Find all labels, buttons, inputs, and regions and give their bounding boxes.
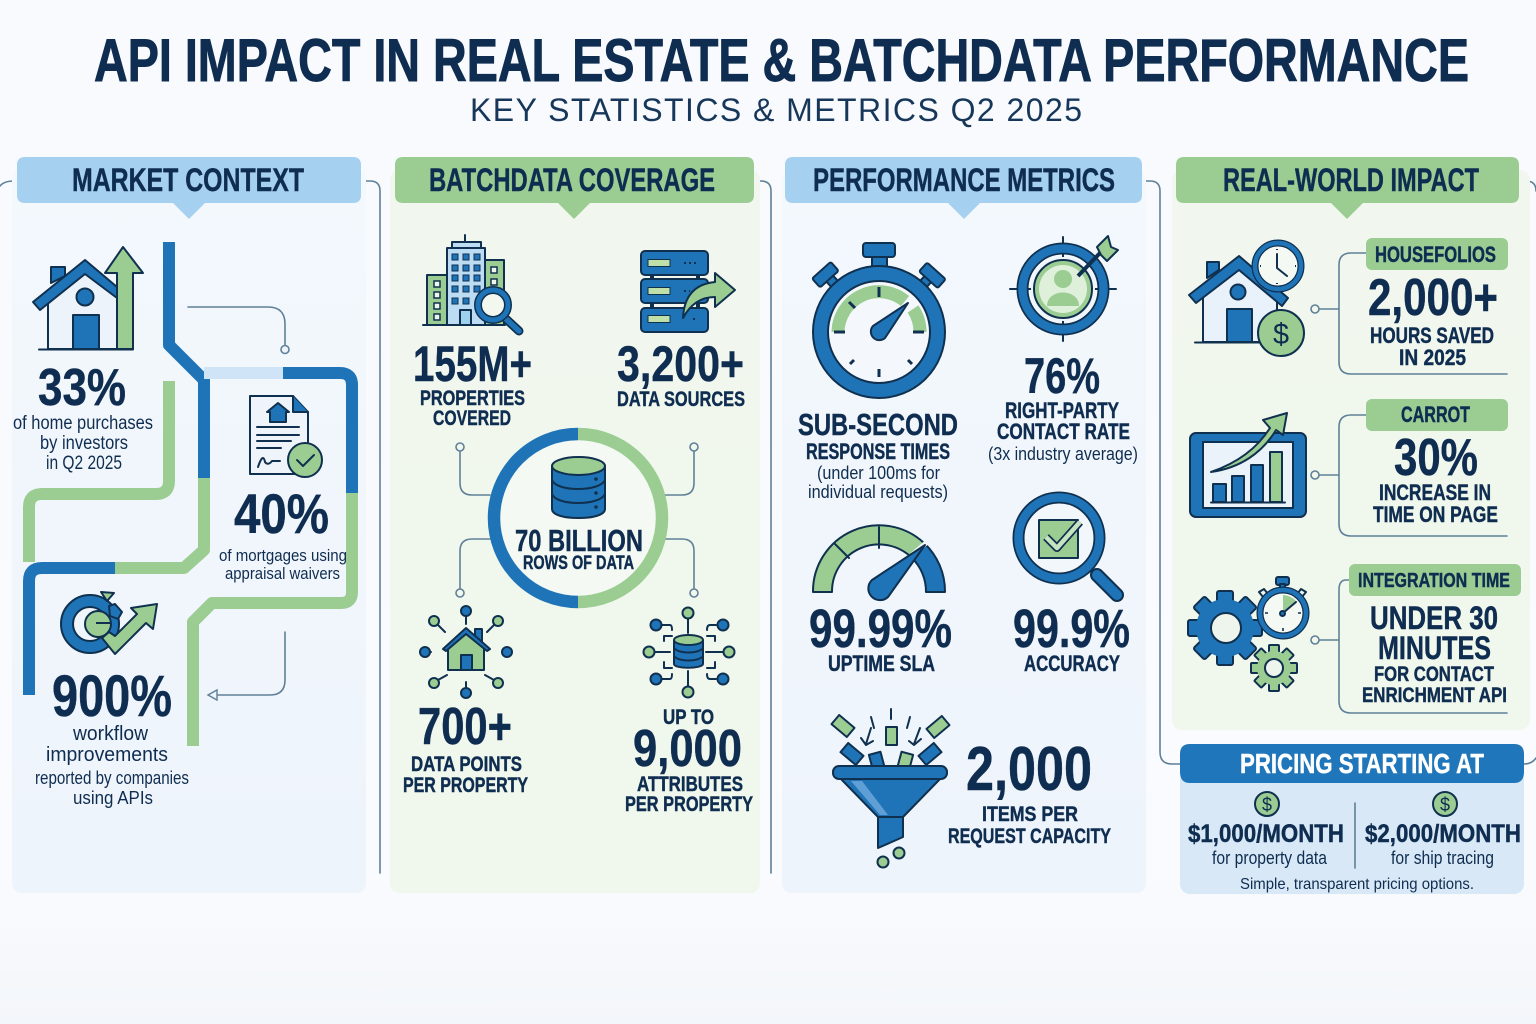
stat: 155M+ properties covered	[413, 336, 532, 430]
callout: carrot: CARROT	[1401, 402, 1470, 427]
stat: 900%: workflow	[72, 723, 149, 745]
callout: integration time: UNDER 30	[1370, 600, 1498, 636]
stat: 40%: of mortgages using	[219, 546, 347, 565]
stat: 2,000 items per request: ITEMS PER	[982, 803, 1078, 826]
callout: housefolios: IN 2025	[1399, 345, 1466, 370]
callout: carrot: 30%	[1394, 429, 1478, 487]
stat: 99.9% accuracy: 99.9%	[1013, 599, 1130, 659]
stat: up to 9,000 attributes: UP TO	[663, 706, 714, 729]
icon: house with clock and dollar: $	[1273, 318, 1289, 351]
stat: up to 9,000 attributes: PER PROPERTY	[625, 793, 753, 816]
callout: carrot: INCREASE IN	[1379, 480, 1491, 505]
header: real-world impact	[1176, 157, 1519, 219]
stat: 700+ data points	[403, 698, 528, 797]
pricing note: Simple, transparent pricing options.	[1240, 876, 1474, 893]
icon: buildings with magnifier	[423, 235, 519, 331]
stat: 99.9% accuracy	[1013, 599, 1130, 676]
header: market context: MARKET CONTEXT	[72, 162, 304, 198]
callout: integration time	[1311, 564, 1521, 713]
stat: 700+ data points: 700+	[418, 698, 512, 756]
icon: circular target with rising arrow	[67, 592, 157, 654]
stat: sub-second response times	[798, 407, 958, 502]
icon: uptime gauge	[813, 525, 945, 600]
header: pricing starting at	[1180, 744, 1524, 783]
header: batchdata coverage	[395, 157, 754, 219]
callout: integration time: FOR CONTACT	[1374, 663, 1494, 686]
panel: market context	[12, 157, 366, 893]
callout: housefolios	[1311, 238, 1508, 374]
stat: sub-second response times: (under 100ms for	[817, 463, 940, 483]
panel: real-world impact	[1172, 157, 1530, 730]
panel: pricing	[1180, 744, 1524, 894]
stat: 900%: using APIs	[73, 788, 153, 808]
stat: 700+ data points: DATA POINTS	[411, 753, 522, 776]
price: $1,000 per month	[1188, 792, 1344, 868]
stat: 900%	[35, 664, 189, 808]
connector lines around central ring	[456, 443, 698, 597]
icon: funnel with data pieces	[831, 709, 950, 868]
header: batchdata coverage: BATCHDATA COVERAGE	[429, 162, 715, 198]
stat: 99.99% uptime	[809, 599, 952, 676]
stat: 155M+ properties covered: PROPERTIES	[420, 387, 525, 410]
icon: tablet with rising chart	[1190, 413, 1306, 517]
stat: up to 9,000 attributes: 9,000	[633, 720, 742, 778]
callout: housefolios: 2,000+	[1368, 269, 1498, 327]
stat: 700+ data points: PER PROPERTY	[403, 774, 528, 797]
stat: 40%	[219, 482, 347, 583]
stat: 33%: in Q2 2025	[46, 453, 122, 474]
stat: 155M+ properties covered: COVERED	[433, 407, 511, 430]
callout: housefolios: HOURS SAVED	[1370, 323, 1494, 348]
stat: 33%: of home purchases	[13, 413, 153, 434]
price: $1,000 per month: for property data	[1212, 848, 1328, 868]
stat: 40%: appraisal waivers	[225, 564, 340, 583]
panel: performance metrics	[782, 157, 1146, 893]
price: $1,000 per month: $1,000/MONTH	[1188, 820, 1344, 848]
subtitle: KEY STATISTICS & METRICS Q2 2025	[470, 92, 1082, 128]
stat: 33%: by investors	[40, 433, 128, 454]
icon: stopwatch	[812, 243, 946, 390]
icon: target with person and arrow	[1010, 236, 1118, 341]
price: $2,000 per month: $	[1440, 795, 1450, 816]
callout: carrot	[1311, 399, 1508, 536]
stat: 900%: improvements	[46, 744, 168, 766]
callout: integration time: MINUTES	[1378, 630, 1491, 666]
header: performance metrics	[785, 157, 1142, 219]
central ring: 70 billion rows of data	[494, 434, 662, 602]
stat: 2,000 items per request: 2,000	[966, 735, 1092, 804]
callout: housefolios: HOUSEFOLIOS	[1375, 242, 1496, 267]
stat: 76% right-party contact rate	[988, 348, 1138, 464]
stat: 2,000 items per request	[948, 735, 1111, 848]
central ring: 70 billion rows of data: ROWS OF DATA	[523, 553, 634, 574]
stat: 3,200+ data sources: DATA SOURCES	[617, 388, 745, 411]
icon: house with data nodes	[420, 606, 512, 698]
icon: signed document with check	[250, 396, 322, 477]
winding pipes	[29, 242, 352, 746]
callout: carrot: TIME ON PAGE	[1373, 502, 1498, 527]
stat: 99.99% uptime: UPTIME SLA	[828, 651, 935, 676]
icon: magnifier with checkbox	[1018, 498, 1117, 595]
stat: 76% right-party contact rate: (3x industry average)	[988, 444, 1138, 464]
icon: house with growth arrow	[33, 247, 143, 350]
stat: 3,200+ data sources	[617, 336, 745, 411]
stat: 40%: 40%	[234, 482, 329, 545]
stat: 33%	[13, 359, 153, 474]
price: $2,000 per month: for ship tracing	[1391, 848, 1494, 868]
stat: 2,000 items per request: REQUEST CAPACITY	[948, 825, 1111, 848]
stat: 3,200+ data sources: 3,200+	[617, 336, 744, 392]
panel: batchdata coverage	[390, 157, 760, 893]
stat: up to 9,000 attributes: ATTRIBUTES	[637, 773, 743, 796]
stat: sub-second response times: individual requests)	[808, 482, 948, 502]
price: $1,000 per month: $	[1262, 795, 1272, 816]
header: market context	[17, 157, 361, 219]
stat: 99.9% accuracy: ACCURACY	[1024, 651, 1120, 676]
header: performance metrics: PERFORMANCE METRICS	[813, 162, 1115, 198]
price: $2,000 per month: $2,000/MONTH	[1365, 820, 1521, 848]
stat: 76% right-party contact rate: RIGHT-PARTY	[1005, 398, 1119, 423]
stat: 76% right-party contact rate: 76%	[1024, 348, 1100, 404]
stat: 900%: reported by companies	[35, 768, 189, 788]
icon: gears with stopwatch	[1188, 577, 1306, 691]
stat: sub-second response times: RESPONSE TIMES	[806, 439, 950, 464]
central ring: 70 billion rows of data: 70 BILLION	[515, 523, 643, 558]
stat: 99.99% uptime: 99.99%	[809, 599, 952, 659]
stat: sub-second response times: SUB-SECOND	[798, 407, 958, 442]
icon: database with data nodes	[644, 608, 734, 698]
stat: up to 9,000 attributes	[625, 706, 753, 816]
stat: 155M+ properties covered: 155M+	[413, 336, 532, 392]
stat: 33%: 33%	[38, 359, 126, 417]
stat: 900%: 900%	[52, 664, 172, 729]
icon: house with clock and dollar	[1189, 243, 1304, 356]
connector lines between panels	[0, 181, 1536, 873]
stat: 76% right-party contact rate: CONTACT RATE	[997, 419, 1130, 444]
price: $2,000 per month	[1365, 792, 1521, 868]
icon: server stack with arrow	[641, 251, 735, 332]
